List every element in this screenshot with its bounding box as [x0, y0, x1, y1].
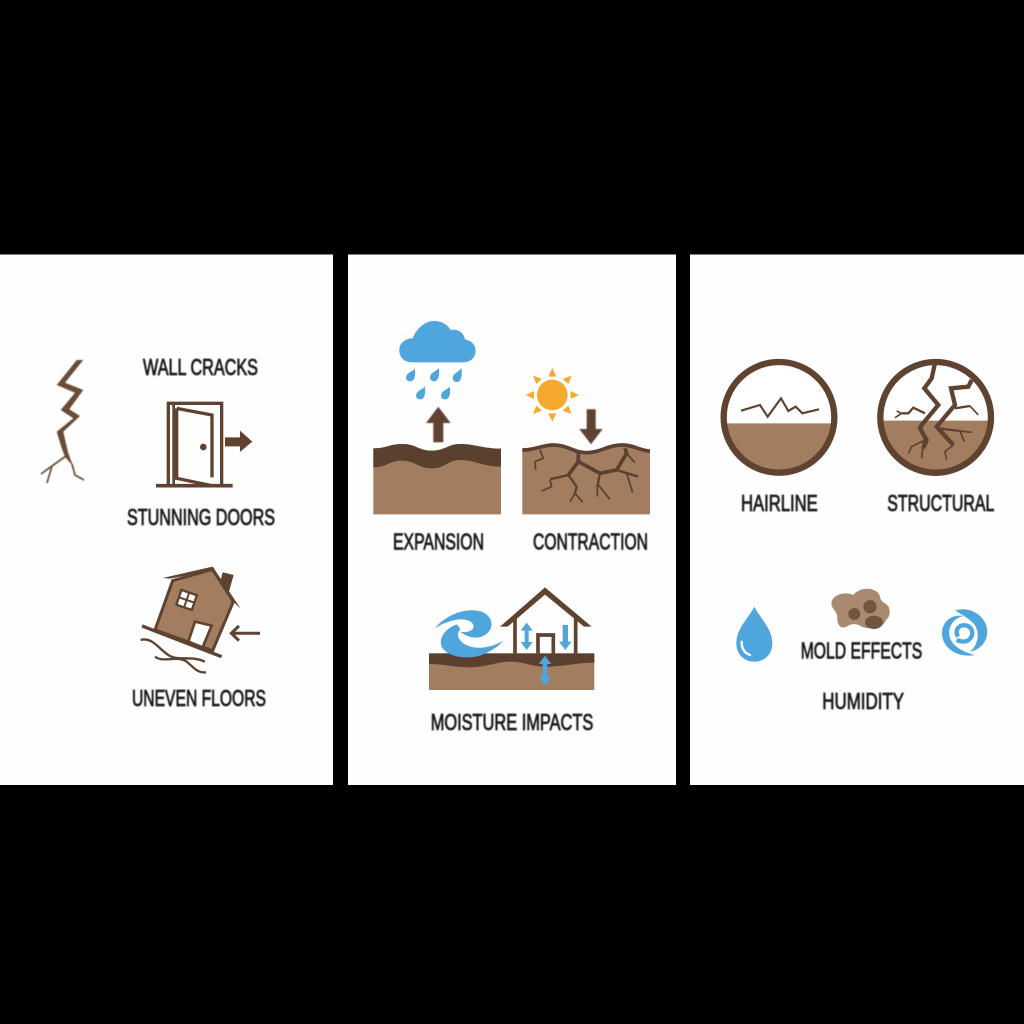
label: mold effects: MOLD EFFECTS [801, 637, 922, 663]
icon: structural crack circle [880, 362, 991, 476]
icon: humidity swirl [942, 609, 987, 656]
illustration: moisture impacts on house [429, 587, 594, 690]
label: humidity: HUMIDITY [822, 688, 904, 714]
label: uneven floors: UNEVEN FLOORS [132, 685, 266, 711]
icon: mold patch [831, 589, 890, 629]
panel: soil behaviour [348, 254, 676, 785]
icon: tilted house on wavy ground [141, 567, 260, 672]
icon: sticking door with arrow [156, 403, 252, 486]
label: stunning doors: STUNNING DOORS [127, 504, 275, 530]
arrow: down [579, 409, 603, 444]
label: contraction: CONTRACTION [533, 528, 648, 554]
icon: hairline crack circle [724, 362, 834, 473]
illustration: cracked contracting soil [522, 445, 650, 514]
icon: wall crack [41, 360, 84, 483]
panel: symptoms [0, 254, 333, 785]
illustration: expanding soil [373, 444, 501, 514]
icon: water drop [736, 607, 772, 662]
icon: sun [526, 368, 579, 421]
label: hairline: HAIRLINE [741, 490, 818, 516]
icon: rain cloud [399, 321, 476, 399]
panel: crack types and moisture effects [690, 254, 1024, 785]
heading: wall cracks: WALL CRACKS [143, 354, 258, 380]
label: moisture impacts: MOISTURE IMPACTS [431, 709, 593, 735]
arrow: up [426, 407, 451, 442]
label: expansion: EXPANSION [393, 528, 484, 554]
